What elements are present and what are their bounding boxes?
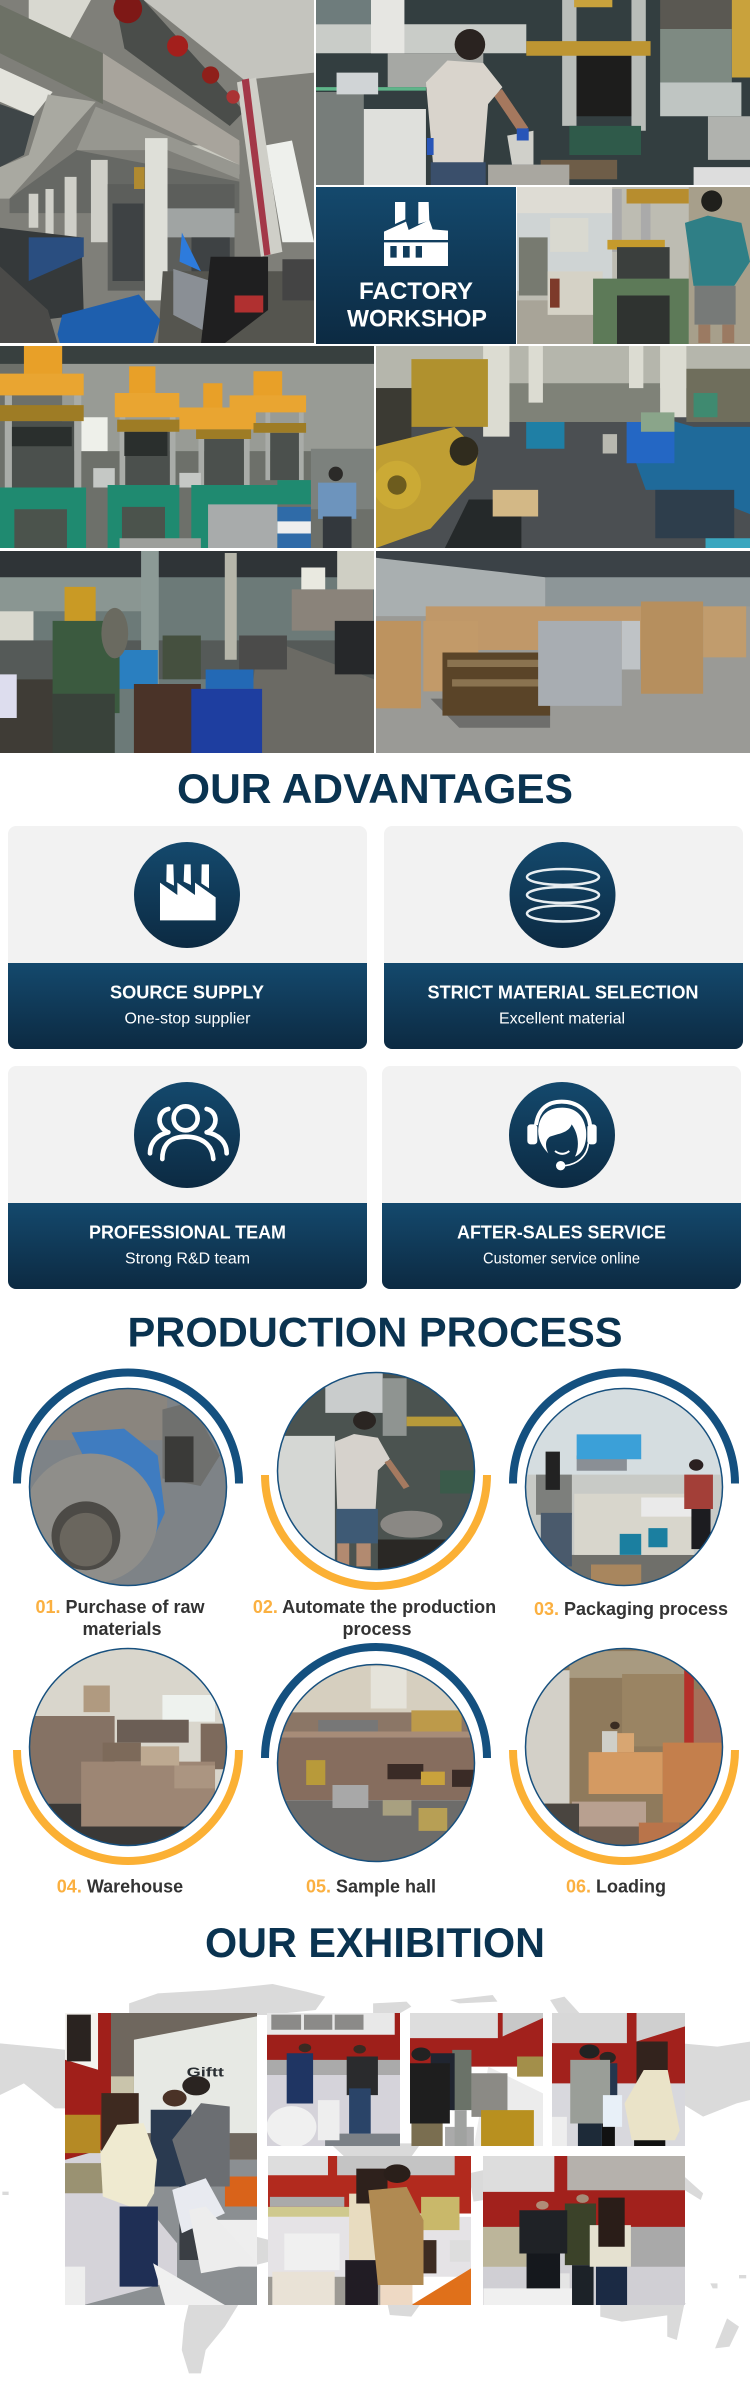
label: process <box>342 1619 412 1639</box>
label: 04. Warehouse <box>57 1876 183 1896</box>
step 3: packaging process <box>513 1372 735 1619</box>
label: 02. Automate the production <box>253 1597 496 1617</box>
title text: WORKSHOP <box>347 306 487 332</box>
icon: headset agent <box>527 1102 597 1170</box>
card text <box>428 982 698 1028</box>
panel: source supply card <box>8 826 367 1049</box>
photo: woman and men at counter <box>552 2013 685 2146</box>
card text: Strong R&D team <box>125 1250 250 1268</box>
step 6: loading <box>513 1648 735 1896</box>
card text <box>110 982 264 1028</box>
label <box>253 1597 496 1639</box>
arc: orange bottom <box>265 1475 487 1586</box>
card text <box>89 1222 286 1268</box>
label: 01. Purchase of raw <box>35 1597 206 1617</box>
arc: orange bottom <box>513 1750 735 1861</box>
photo: worker at robot press <box>316 0 750 185</box>
photo: press worker <box>278 1372 474 1570</box>
background: world map <box>0 1984 750 2374</box>
heading: our advantages: OUR ADVANTAGES <box>177 765 573 812</box>
card text: Excellent material <box>499 1010 625 1028</box>
panel: factory workshop photo collage <box>0 0 750 753</box>
icon: team <box>150 1106 227 1159</box>
step 2: automate the production process <box>253 1372 496 1639</box>
panel: professional team card <box>8 1066 367 1289</box>
title text: FACTORY <box>359 278 473 305</box>
photo: factory hall with lanterns <box>0 0 314 343</box>
label <box>35 1597 206 1639</box>
photo: warehouse with boxes and pallets <box>376 551 750 753</box>
photo: punch presses and blue crate <box>0 551 374 753</box>
photo: packaging line <box>526 1388 722 1586</box>
card text: STRICT MATERIAL SELECTION <box>428 982 698 1002</box>
panel: strict material selection card <box>384 826 743 1049</box>
photo: orange hydraulic presses <box>0 346 374 548</box>
card text: One-stop supplier <box>124 1010 251 1028</box>
icon: factory <box>384 202 448 266</box>
photo: steel coils <box>24 1388 227 1586</box>
photo: booth with visitors <box>65 2013 257 2305</box>
step 1: purchase of raw materials <box>17 1372 239 1639</box>
arc: blue top <box>513 1372 735 1484</box>
photo: visitors from behind <box>483 2156 685 2305</box>
heading: production process: PRODUCTION PROCESS <box>128 1308 622 1356</box>
photo: container loading <box>526 1648 722 1846</box>
label: 03. Packaging process <box>534 1599 728 1619</box>
card text: PROFESSIONAL TEAM <box>89 1222 286 1242</box>
label: 06. Loading <box>566 1876 666 1896</box>
icon: factory <box>160 864 216 920</box>
photo: booth with visitors: Giftt <box>187 2066 225 2080</box>
photo: two men at booth <box>267 2013 400 2146</box>
card text <box>457 1222 666 1268</box>
label: 05. Sample hall <box>306 1876 436 1896</box>
label: materials <box>82 1619 162 1639</box>
panel: after-sales service card <box>382 1066 741 1289</box>
photo: worker in teal shirt at press <box>517 187 750 344</box>
photo: workshop aisle with blue stock <box>376 346 750 548</box>
photo: showroom shelves <box>278 1664 474 1862</box>
arc: blue top <box>265 1647 487 1758</box>
step 5: sample hall <box>265 1647 487 1896</box>
icon: coils <box>527 869 599 922</box>
photo: visitors along counter <box>410 2013 543 2146</box>
card text: Customer service online <box>483 1250 640 1268</box>
arc: orange bottom <box>17 1750 239 1861</box>
heading: our exhibition: OUR EXHIBITION <box>205 1919 545 1966</box>
photo: two women with phone <box>268 2156 471 2305</box>
title text <box>347 278 487 332</box>
step 4: warehouse <box>17 1648 239 1896</box>
arc: blue top <box>17 1372 239 1484</box>
card text: SOURCE SUPPLY <box>110 982 264 1002</box>
panel: exhibition photo collage <box>65 2013 685 2305</box>
panel: factory workshop title tile <box>316 187 516 344</box>
card text: AFTER-SALES SERVICE <box>457 1222 666 1242</box>
photo: stacked cartons <box>30 1648 226 1846</box>
